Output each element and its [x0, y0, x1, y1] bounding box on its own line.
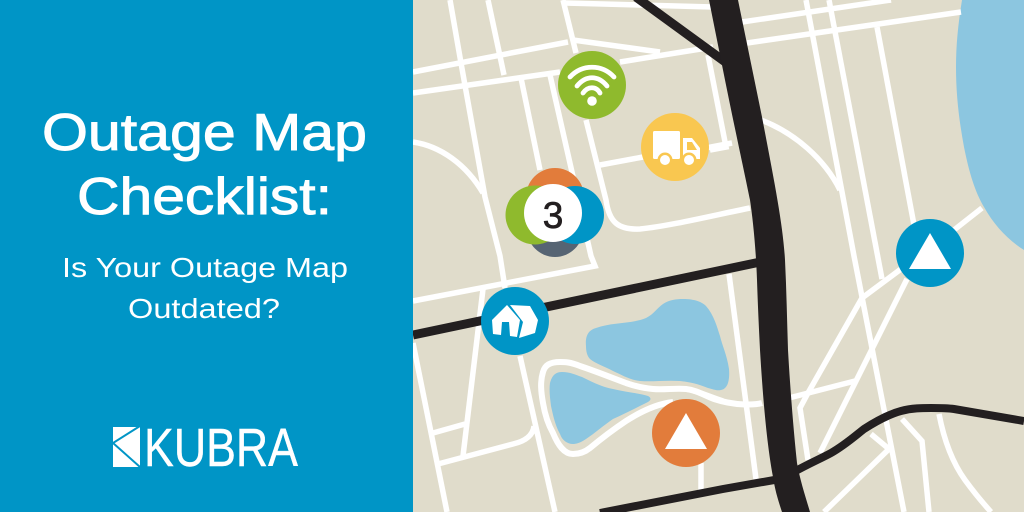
marker: blue triangle [896, 219, 964, 287]
subtitle [62, 252, 348, 324]
map background [413, 0, 1024, 512]
logo mark [113, 426, 140, 467]
title: Outage Map [42, 104, 367, 162]
subtitle: Outdated? [128, 293, 280, 324]
marker: truck [641, 113, 709, 181]
cluster count: 3 [543, 195, 563, 236]
marker: wifi [558, 51, 626, 119]
subtitle: Is Your Outage Map [62, 252, 348, 283]
white road network [413, 0, 991, 512]
left blue panel [0, 0, 413, 512]
marker: cluster of 3 [506, 168, 604, 257]
logo wordmark: KUBRA [144, 418, 298, 478]
title [42, 104, 367, 226]
water: lake and ponds [550, 0, 1024, 444]
title: Checklist: [77, 168, 332, 226]
black highways [413, 0, 1024, 512]
marker: damaged house [481, 287, 549, 355]
KUBRA logo [113, 418, 298, 478]
marker: orange triangle [652, 399, 720, 467]
